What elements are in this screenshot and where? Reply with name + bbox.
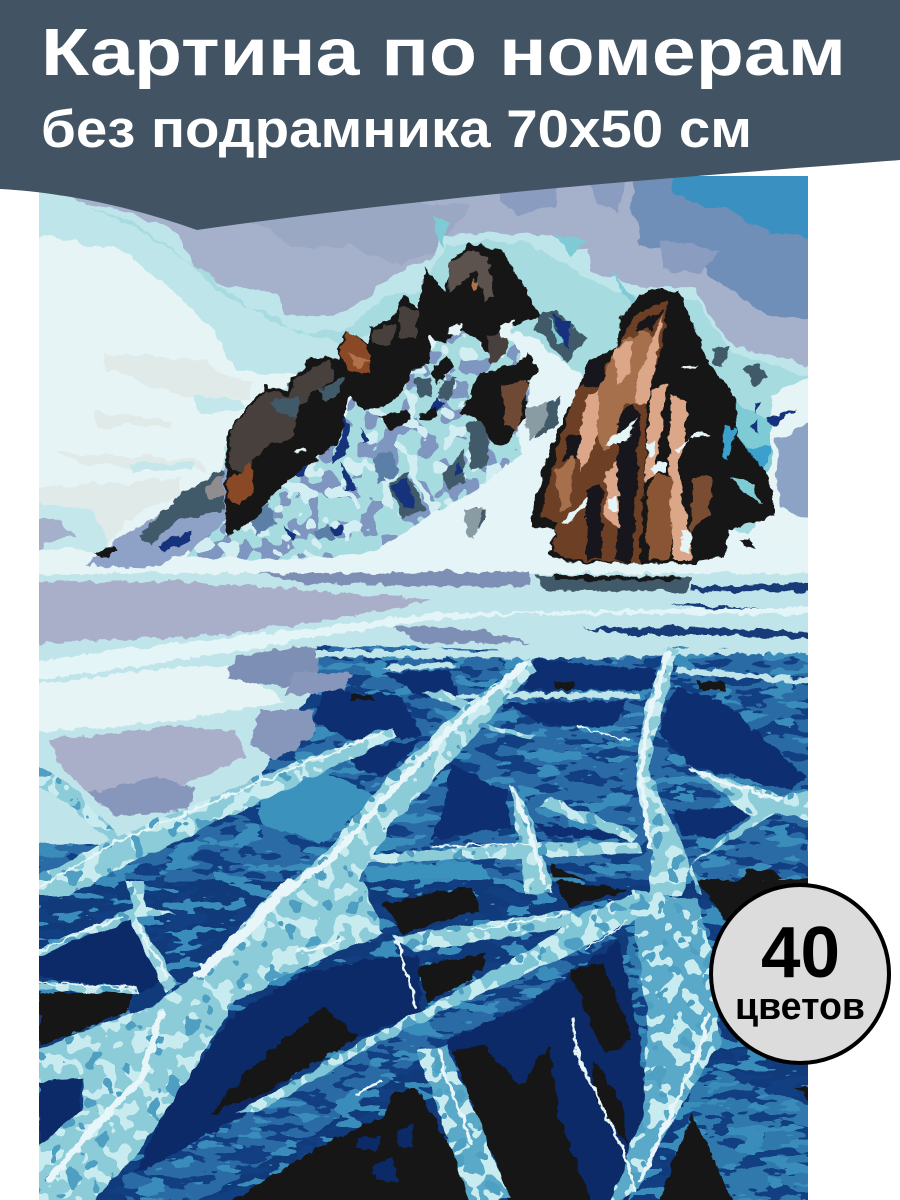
badge: 40 colours	[711, 885, 889, 1063]
painting: frozen lake and mountain	[19, 170, 830, 1200]
mountain	[86, 243, 800, 570]
ice cracks: white cores	[39, 653, 780, 1190]
badge: 40 colours: цветов	[735, 986, 865, 1028]
title: Картина по номерам	[41, 15, 846, 90]
near ice: upper blue field	[19, 645, 830, 893]
mid dark blobs	[380, 353, 537, 447]
ice cracks: wide bands	[19, 647, 830, 1200]
sky	[20, 170, 820, 580]
near ice: lower deep field	[19, 880, 830, 1200]
mottled shadows on the snow	[185, 330, 541, 560]
subtitle: без подрамника 70х50 см	[41, 100, 752, 159]
deep blue patches upper	[88, 645, 830, 893]
far ice: lavender flats and pale streaks	[39, 568, 808, 846]
far cracks	[19, 647, 830, 895]
dark ridge	[225, 243, 541, 537]
badge: 40 colours: 40	[761, 913, 840, 993]
brown rock	[529, 290, 774, 563]
black patches	[39, 880, 830, 1200]
snow slope and lower left ridge	[86, 333, 800, 570]
banner	[0, 0, 900, 230]
